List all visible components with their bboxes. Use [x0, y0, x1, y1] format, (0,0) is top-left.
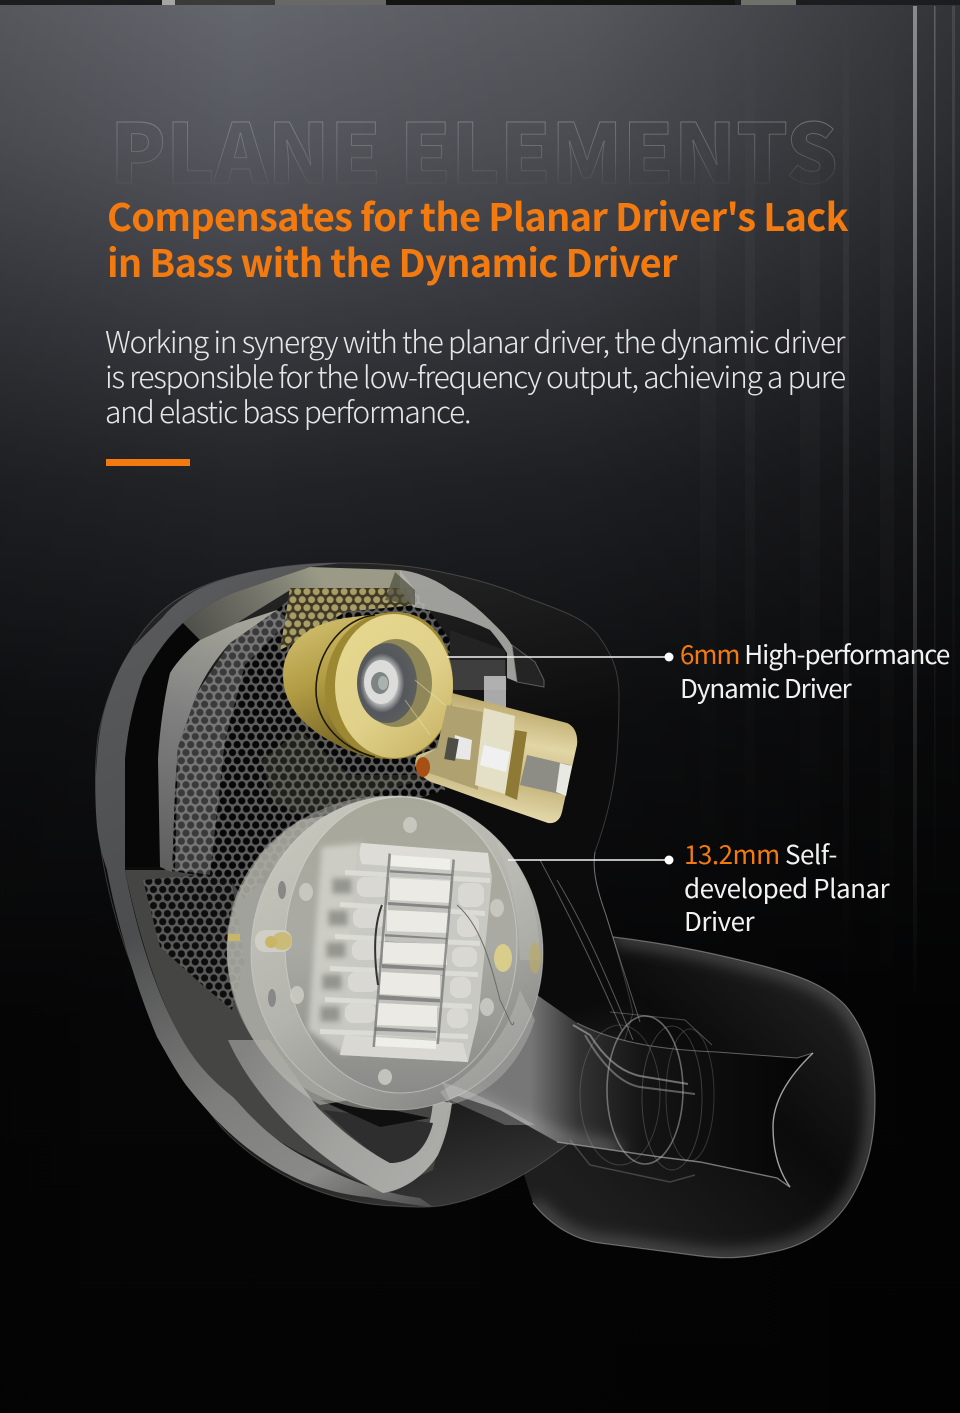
side dots — [290, 817, 504, 1085]
label: 13.2mm planar driver: Driver — [684, 902, 754, 939]
gray strip beside mesh — [158, 610, 277, 872]
disc highlight edge — [251, 796, 543, 1110]
pale frame — [385, 570, 544, 726]
leader line: planar driver — [508, 856, 674, 864]
glass lower shell — [125, 870, 450, 1193]
gold pins — [494, 944, 512, 972]
collars — [580, 1025, 660, 1165]
diaphragm bars — [377, 878, 450, 1027]
orange accent bar — [106, 459, 190, 466]
connector barrel — [415, 693, 577, 823]
lens — [360, 639, 432, 727]
shell body — [95, 563, 633, 1207]
left rim — [96, 563, 433, 1207]
sound tube — [440, 990, 813, 1187]
diaphragm fingers — [345, 877, 484, 1028]
body — [283, 612, 453, 759]
disc outer rim — [227, 796, 543, 1110]
slits — [375, 870, 452, 1038]
label: 6mm dynamic driver: 6mm High-performance — [680, 635, 949, 672]
inner well — [285, 797, 517, 1093]
body text: Working in synergy with the planar driver, the dynamic driver — [105, 318, 844, 362]
nozzle highlight over disc — [442, 1082, 535, 1125]
bottom strip — [340, 1035, 468, 1062]
cavity mesh — [165, 588, 450, 900]
body text — [105, 318, 846, 432]
label: 13.2mm planar driver: developed Planar — [684, 868, 889, 906]
cross bars — [320, 870, 490, 1039]
label: 6mm dynamic driver — [680, 635, 950, 706]
headline: Compensates for the Planar Driver's Lack — [107, 187, 848, 242]
top strip from previous section — [0, 0, 960, 5]
dynamic driver — [283, 612, 453, 759]
ghost fingers — [308, 843, 362, 1055]
block backing — [340, 843, 492, 1062]
background vertical light stripes — [700, 6, 955, 1006]
body text: and elastic bass performance. — [105, 388, 470, 432]
ear tip — [500, 937, 875, 1258]
leader line: dynamic driver — [447, 652, 674, 662]
face — [335, 614, 453, 758]
disc — [251, 796, 543, 1110]
body text: is responsible for the low-frequency output, achieving a pure — [105, 353, 845, 397]
black rim groove — [125, 623, 200, 867]
heading outline text: PLANE ELEMENTS: PLANE ELEMENTS — [110, 88, 838, 207]
label: 13.2mm planar driver: 13.2mm Self- — [684, 835, 837, 872]
lower left mesh — [143, 872, 245, 1010]
planar driver — [227, 796, 543, 1110]
earphone illustration — [95, 563, 875, 1258]
top strip — [360, 843, 490, 873]
lower pale ring — [228, 1040, 452, 1193]
label: 13.2mm planar driver — [684, 835, 890, 939]
stem tube lines — [540, 852, 640, 1040]
headline: in Bass with the Dynamic Driver — [107, 233, 677, 288]
brushed upper band — [183, 567, 415, 640]
headline — [107, 187, 848, 288]
label: 6mm dynamic driver: Dynamic Driver — [680, 668, 851, 706]
